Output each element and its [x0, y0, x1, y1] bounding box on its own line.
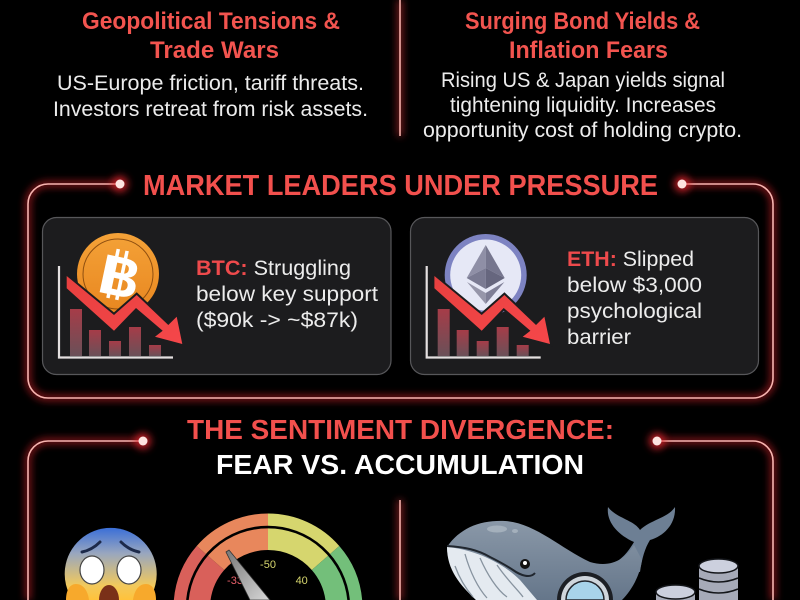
text: bond yields body: opportunity cost of holding crypto. — [423, 119, 742, 142]
heading: geopolitical: Trade Wars — [150, 37, 279, 64]
chart: BTC falling bars — [59, 266, 173, 358]
text: geopolitical body: Investors retreat from risk assets. — [53, 98, 368, 121]
icon: whale with magnifier — [447, 507, 738, 600]
heading: sentiment divergence: FEAR VS. ACCUMULATION — [216, 449, 584, 480]
card: BTC — [42, 218, 391, 374]
arrow: ETH downtrend — [434, 276, 550, 344]
chart: ETH falling bars — [427, 266, 541, 358]
heading: sentiment divergence — [187, 414, 614, 480]
text: BTC description — [196, 257, 378, 332]
whale grooves — [455, 554, 523, 598]
gauge labels: -33 — [227, 575, 243, 587]
heading: geopolitical: Geopolitical Tensions & — [82, 8, 340, 35]
icon: bitcoin coin — [77, 233, 159, 315]
heading: sentiment divergence: THE SENTIMENT DIVERGENCE: — [187, 414, 614, 445]
gauge labels: 40 — [296, 575, 308, 587]
text: bond yields body: tightening liquidity. Increases — [450, 94, 716, 117]
whale head highlights — [487, 526, 518, 533]
whale eye — [520, 559, 530, 569]
gauge needle — [226, 550, 270, 600]
text: bond yields body — [423, 69, 742, 142]
heading: geopolitical — [82, 8, 340, 64]
icon: screaming face — [65, 528, 157, 600]
heading: market leaders: MARKET LEADERS UNDER PRESSURE — [143, 170, 658, 202]
panel: geopolitical tensions — [53, 8, 368, 121]
panel: sentiment frame — [28, 433, 773, 600]
text: ETH description: ETH: Slipped — [567, 248, 694, 271]
text: ETH description: barrier — [567, 326, 631, 349]
text: BTC description: BTC: Struggling — [196, 257, 351, 280]
text: bond yields body: Rising US & Japan yields signal — [441, 69, 725, 92]
text: ETH description — [567, 248, 702, 349]
text: geopolitical body: US-Europe friction, tariff threats. — [57, 72, 364, 95]
top divider — [398, 0, 402, 136]
icon: bitcoin coin: B — [94, 241, 146, 312]
bottom divider — [398, 500, 402, 600]
heading: bond yields: Inflation Fears — [509, 37, 668, 64]
text: BTC description: below key support — [196, 283, 378, 306]
chart: fear and greed gauge — [174, 514, 362, 600]
card: ETH — [410, 218, 758, 374]
whale mouth — [447, 546, 535, 576]
text: ETH description: psychological — [567, 300, 702, 323]
icon: ethereum coin — [445, 234, 527, 316]
heading: bond yields: Surging Bond Yields & — [465, 8, 700, 35]
whale body — [447, 521, 642, 600]
panel: bond yields — [423, 8, 742, 142]
text: geopolitical body — [53, 72, 368, 121]
whale belly — [447, 547, 537, 600]
magnifier — [557, 572, 613, 600]
coin stacks — [656, 559, 738, 600]
text: ETH description: below $3,000 — [567, 274, 702, 297]
heading: bond yields — [465, 8, 700, 64]
whale tail — [608, 507, 675, 572]
gauge labels — [227, 559, 308, 587]
arrow: BTC downtrend — [67, 276, 182, 344]
panel: market leaders frame — [28, 176, 773, 398]
gauge labels: -50 — [260, 559, 276, 571]
text: BTC description: ($90k -> ~$87k) — [196, 309, 358, 332]
